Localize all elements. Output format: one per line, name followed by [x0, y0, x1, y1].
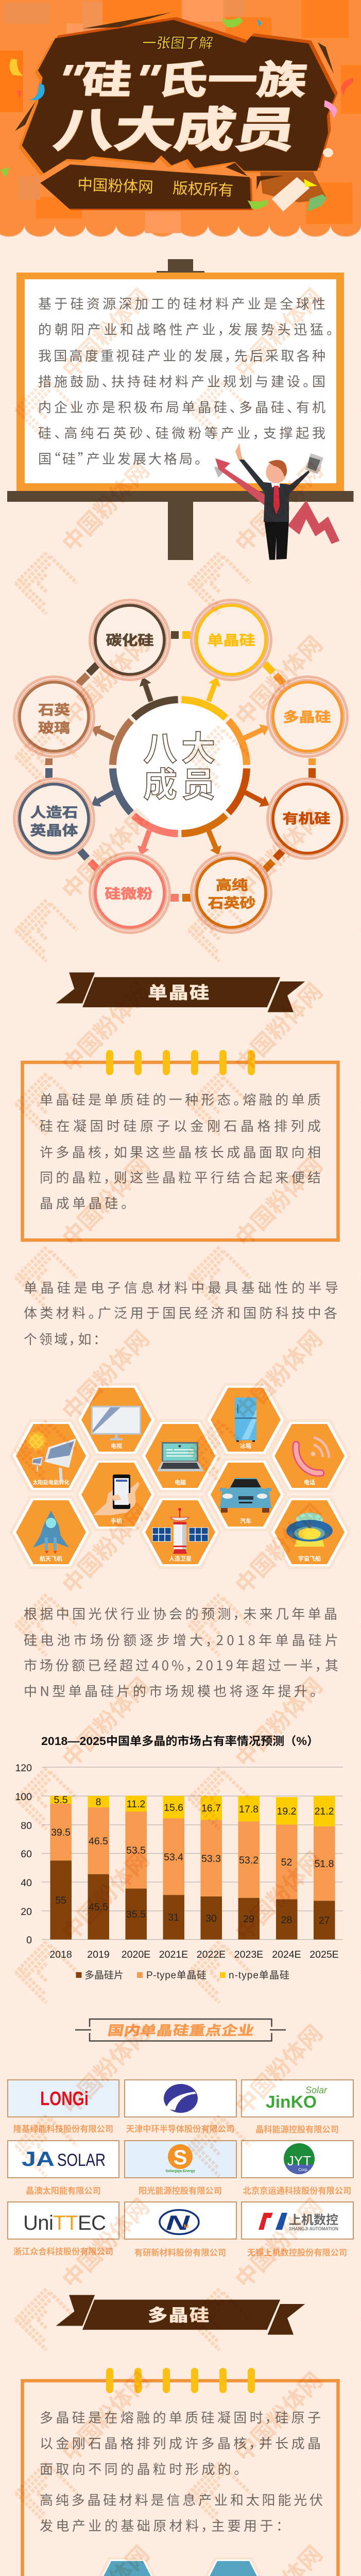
intro paragraph: 措施鼓励、扶持硅材料产业规划与建设。国	[38, 371, 325, 391]
legend	[76, 1970, 289, 1981]
definition text: 同的晶粒，则这些晶粒平行结合起来便结	[40, 1167, 321, 1187]
hex: 手机: 手机	[111, 1517, 122, 1525]
definition text: 高纯多晶硅材料是信息产业和太阳能光伏	[40, 2490, 323, 2509]
data labels	[51, 1794, 334, 1926]
member: 人造石英晶体	[13, 777, 95, 860]
y axis labels: 80	[21, 1820, 32, 1832]
company: 隆基: LONGi	[40, 2088, 89, 2110]
company: 中环	[125, 2080, 236, 2134]
intro paragraph: 硅、高纯石英砂、硅微粉等产业，支撑起我	[38, 423, 325, 442]
y axis labels: 120	[15, 1762, 32, 1774]
data labels: 39.5	[51, 1827, 71, 1838]
member: 人造石英晶体: 英晶体	[30, 820, 78, 839]
legend: 多晶硅片	[84, 1970, 124, 1981]
company grid: mono-silicon	[8, 2080, 353, 2258]
data labels: 17.8	[239, 1804, 259, 1815]
data labels: 15.6	[164, 1802, 183, 1814]
text: applications intro	[24, 1278, 338, 1348]
hex: 电话: 电话	[304, 1478, 315, 1486]
text: 中国粉体网	[226, 1842, 329, 1947]
heading: 八大成员: 八大成员	[49, 92, 302, 160]
x axis labels: 2023E	[234, 1949, 263, 1960]
panel: 多晶硅 notebook	[23, 2368, 338, 2576]
hex: 电视	[75, 1383, 158, 1456]
text: 中国粉体网	[226, 801, 329, 905]
text: 中国粉体网	[226, 627, 329, 732]
definition text: 硅在凝固时硅原子以金刚石晶格排列成	[40, 1116, 321, 1135]
company: 京运通: 北京京运通科技股份有限公司	[243, 2184, 351, 2196]
company: 京运通: Corp.	[298, 2167, 308, 2172]
hex: 手机	[75, 1458, 158, 1531]
intro paragraph: 的朝阳产业和战略性产业，发展势头迅猛。	[38, 319, 333, 338]
y axis labels: 0	[26, 1935, 32, 1946]
connectors	[49, 631, 312, 902]
diagram: eight members	[13, 599, 349, 934]
text: 中国粉体网	[53, 1321, 156, 1426]
member: 多晶硅	[266, 675, 349, 758]
company: 京运通	[242, 2141, 353, 2196]
intro paragraph: 国“硅”产业发展大格局。	[38, 449, 201, 468]
member: 碳化硅: 碳化硅	[106, 630, 153, 649]
data labels: 46.5	[89, 1836, 108, 1847]
hex: 电脑	[139, 1419, 222, 1493]
hex: 汽车: 汽车	[240, 1517, 251, 1525]
kicker: 一张图了解: 一张图了解	[141, 31, 214, 52]
definition text	[40, 1090, 321, 1212]
panel: intro board	[7, 259, 353, 560]
text: market forecast: 中N型单晶硅片的市场规模也将逐年提升。	[24, 1681, 317, 1700]
definition text: 多晶硅是在熔融的单质硅凝固时，硅原子	[40, 2408, 321, 2427]
text: 中国粉体网	[53, 801, 156, 905]
hexagon grid: applications	[9, 1383, 351, 1569]
hex: 太阳能电能转化: 太阳能电能转化	[32, 1478, 70, 1486]
text: 中国粉体网	[226, 280, 329, 384]
text: market forecast: 根据中国光伏行业协会的预测，未来几年单晶	[24, 1604, 337, 1623]
center hub: 大	[181, 721, 215, 771]
confetti and props	[1, 17, 353, 211]
company: 上机	[242, 2202, 353, 2258]
binder rings	[106, 1050, 255, 1075]
company: 众合	[8, 2202, 119, 2257]
company: 有研: N	[166, 2212, 191, 2234]
company: 晶科: JinKO	[266, 2092, 317, 2111]
text: 中国粉体网	[226, 2190, 329, 2294]
company: 隆基	[8, 2080, 119, 2134]
hex: 航天飞机	[9, 1496, 93, 1569]
definition text	[40, 2408, 323, 2535]
text: 中国粉体网	[226, 1669, 329, 1773]
data labels: 16.7	[201, 1803, 221, 1814]
center hub: 成	[143, 757, 177, 807]
hex: 宇宙飞船: 宇宙飞船	[298, 1554, 321, 1563]
text: applications intro: 个领域，如：	[24, 1329, 100, 1348]
title blob	[15, 12, 338, 176]
member: 有机硅	[266, 777, 349, 860]
data labels: 53.5	[126, 1845, 146, 1856]
text: 中国粉体网	[53, 974, 156, 1079]
data labels: 53.2	[239, 1855, 259, 1866]
text: 中国粉体网	[226, 2363, 329, 2468]
legend: P-type单晶硅	[146, 1970, 207, 1981]
data labels: 19.2	[277, 1806, 296, 1817]
definition text: 晶成单晶硅。	[40, 1193, 128, 1212]
board post top	[157, 259, 204, 283]
data labels: 29	[243, 1913, 254, 1925]
text: applications intro: 体类材料。广泛用于国民经济和国防科技中各	[24, 1303, 337, 1322]
text: 中国粉体网	[53, 627, 156, 732]
text: 中国粉体网	[226, 1148, 329, 1252]
x axis labels: 2024E	[272, 1949, 301, 1960]
text: 中国粉体网	[53, 2363, 156, 2468]
company: 阳光能源	[125, 2141, 236, 2196]
x axis labels	[49, 1949, 339, 1960]
center hub	[113, 700, 247, 834]
panel: 单晶硅 notebook	[23, 1050, 338, 1240]
company: 阳光能源: S	[174, 2146, 187, 2169]
subtitle text: 版权所有	[173, 176, 234, 200]
text: 中国粉体网	[53, 1669, 156, 1773]
hex: 宇宙飞船	[268, 1496, 351, 1569]
member: 石英玻璃: 石英	[38, 700, 70, 719]
text: 中国粉体网	[226, 974, 329, 1079]
data labels: 55	[55, 1895, 66, 1906]
member: 石英玻璃: 玻璃	[38, 718, 70, 737]
member: 碳化硅	[89, 599, 171, 681]
company: 晶科	[242, 2080, 353, 2135]
hex: 冰箱: 冰箱	[240, 1442, 251, 1450]
x axis labels: 2021E	[159, 1949, 188, 1960]
section ribbon: 单晶硅: 单晶硅	[148, 979, 210, 1004]
text: 中国粉体网	[53, 2016, 156, 2121]
subheading: 国内单晶硅重点企业	[75, 2019, 286, 2041]
company: 晶澳: JA	[22, 2148, 55, 2171]
chart title: 2018—2025中国单多晶的市场占有率情况预测（%）	[41, 1735, 319, 1748]
text: 中国粉体网	[226, 453, 329, 558]
header banner	[0, 0, 361, 237]
text: applications intro: 单晶硅是电子信息材料中最具基础性的半导	[24, 1278, 338, 1297]
hex: 汽车	[204, 1458, 287, 1531]
text: market forecast	[24, 1604, 338, 1700]
text: 中国粉体网	[53, 1842, 156, 1947]
y axis labels	[15, 1762, 32, 1946]
center hub: 八	[143, 721, 177, 771]
data labels: 8	[96, 1797, 101, 1808]
company: 有研: M	[184, 2224, 188, 2230]
hex: 人造卫星	[139, 1496, 222, 1569]
definition text: 许多晶核，如果这些晶核长成晶面取向相	[40, 1142, 321, 1161]
intro paragraph: 内企业亦是积极布局单晶硅、多晶硅、有机	[38, 397, 325, 416]
chart: market share stacked bars	[15, 1735, 343, 1981]
y axis labels: 100	[15, 1791, 32, 1803]
data labels: 5.5	[54, 1794, 68, 1806]
illustration: businessman with arrow	[214, 443, 339, 560]
member: 硅微粉	[89, 852, 171, 934]
hex: 冰箱	[204, 1383, 287, 1456]
member: 有机硅: 有机硅	[283, 808, 330, 827]
x axis labels: 2018	[49, 1949, 72, 1960]
member: 单晶硅	[190, 599, 272, 681]
text: 中国粉体网	[53, 1495, 156, 1600]
text: 中国粉体网	[53, 1148, 156, 1252]
text: 中国粉体网	[226, 1495, 329, 1600]
y axis labels: 40	[21, 1877, 32, 1889]
data labels: 30	[205, 1913, 217, 1924]
hex: 电视: 电视	[111, 1442, 122, 1450]
hex: 电脑: 电脑	[175, 1478, 186, 1486]
data labels: 21.2	[315, 1806, 334, 1817]
heading: “硅”氏一族: "	[124, 57, 168, 103]
data labels: 27	[319, 1915, 330, 1926]
data labels: 53.4	[164, 1852, 183, 1863]
text: market forecast: 硅电池市场份额逐步增大，2018年单晶硅片	[24, 1630, 338, 1649]
x axis labels: 2022E	[197, 1949, 226, 1960]
text: 中国粉体网	[226, 1321, 329, 1426]
member: 高纯石英砂	[190, 852, 272, 934]
intro paragraph: 基于硅资源深加工的硅材料产业是全球性	[38, 294, 325, 313]
x axis labels: 2025E	[310, 1949, 339, 1960]
company: 众合: UniTTEC	[23, 2212, 106, 2234]
data labels: 53.3	[201, 1853, 221, 1865]
binder rings	[106, 2368, 255, 2393]
x axis labels: 2020E	[122, 1949, 150, 1960]
heading: “硅”氏一族	[47, 49, 310, 105]
intro paragraph: 我国高度重视硅产业的发展，先后采取各种	[38, 346, 325, 365]
intro paragraph	[38, 294, 333, 468]
section ribbon: 多晶硅	[56, 2295, 305, 2335]
member: 石英玻璃	[13, 675, 95, 758]
company: 晶科: 晶科能源控股有限公司	[255, 2123, 339, 2135]
text: 中国粉体网	[53, 280, 156, 384]
y axis labels: 60	[21, 1849, 32, 1860]
company: 上机: 上机数控	[289, 2210, 338, 2228]
company: 晶澳: SOLAR	[57, 2150, 106, 2170]
definition text: 发电产业的基础原材料，主要用于：	[40, 2516, 283, 2535]
hex: 人造卫星: 人造卫星	[169, 1554, 192, 1563]
subtitle text: 中国粉体网	[77, 173, 154, 197]
company: 有研	[125, 2202, 236, 2258]
company: 京运通: JYT	[287, 2153, 311, 2168]
member: 多晶硅: 多晶硅	[283, 707, 331, 726]
company: 阳光能源: Solargiga Energy	[165, 2170, 195, 2173]
text: 中国粉体网	[226, 2016, 329, 2121]
data labels: 51.8	[315, 1858, 334, 1870]
member: 高纯石英砂: 石英砂	[208, 893, 255, 912]
data labels: 11.2	[127, 1799, 145, 1810]
data labels: 35.5	[126, 1909, 146, 1920]
data labels: 52	[281, 1857, 292, 1868]
company: 阳光能源: 阳光能源控股有限公司	[139, 2184, 222, 2196]
member: 人造石英晶体: 人造石	[30, 802, 78, 821]
subtitle ribbon	[42, 166, 253, 210]
heading: “硅”氏一族: "	[47, 57, 92, 103]
hex: 电话	[268, 1419, 351, 1493]
x axis labels: 2019	[87, 1949, 110, 1960]
hexagons: uses	[40, 2557, 320, 2576]
member: 单晶硅: 单晶硅	[208, 630, 255, 649]
y axis labels: 20	[21, 1906, 32, 1918]
company: 晶科: Solar	[305, 2085, 328, 2095]
data labels: 45.5	[89, 1902, 108, 1913]
section ribbon: 多晶硅: 多晶硅	[148, 2302, 210, 2326]
data labels: 28	[281, 1914, 292, 1926]
legend: n-type单晶硅	[229, 1970, 289, 1981]
definition text: 单晶硅是单质硅的一种形态。熔融的单质	[40, 1090, 321, 1109]
subheading: 国内单晶硅重点企业: 国内单晶硅重点企业	[107, 2020, 256, 2039]
heading: “硅”氏一族: 氏一族	[156, 49, 310, 105]
hex: 太阳能电能转化	[9, 1419, 93, 1493]
text: 中国粉体网	[53, 453, 156, 558]
company: 晶澳: 晶澳太阳能有限公司	[26, 2184, 101, 2196]
section ribbon: 单晶硅	[56, 972, 305, 1012]
member: 硅微粉: 硅微粉	[105, 884, 153, 903]
company: 众合: 浙江众合科技股份有限公司	[13, 2245, 113, 2257]
definition text: 面取向不同的晶粒时形成的。	[40, 2459, 240, 2478]
hex: 航天飞机: 航天飞机	[40, 1554, 62, 1563]
member: 高纯石英砂: 高纯	[216, 875, 248, 894]
bars	[50, 1795, 335, 1939]
company: 上机: SHANGJI AUTOMATION	[289, 2226, 338, 2231]
company: 有研: 有研新材料股份有限公司	[134, 2246, 226, 2258]
definition text: 以金刚石晶格排列成许多晶核，并长成晶	[40, 2433, 321, 2452]
company: 隆基: 隆基绿能科技股份有限公司	[13, 2122, 113, 2134]
company: 上机: 无锡上机数控股份有限公司	[247, 2246, 347, 2258]
arrows	[88, 675, 272, 858]
text: market forecast: 市场份额已经超过40%，2019年超过一半，其	[24, 1655, 338, 1674]
text: 中国粉体网	[53, 2190, 156, 2294]
center hub: 员	[181, 757, 215, 807]
company: 晶澳	[8, 2141, 119, 2196]
heading: “硅”氏一族: 硅	[79, 49, 135, 105]
company: 中环: 天津中环半导体股份有限公司	[126, 2122, 234, 2134]
data labels: 31	[168, 1912, 179, 1923]
